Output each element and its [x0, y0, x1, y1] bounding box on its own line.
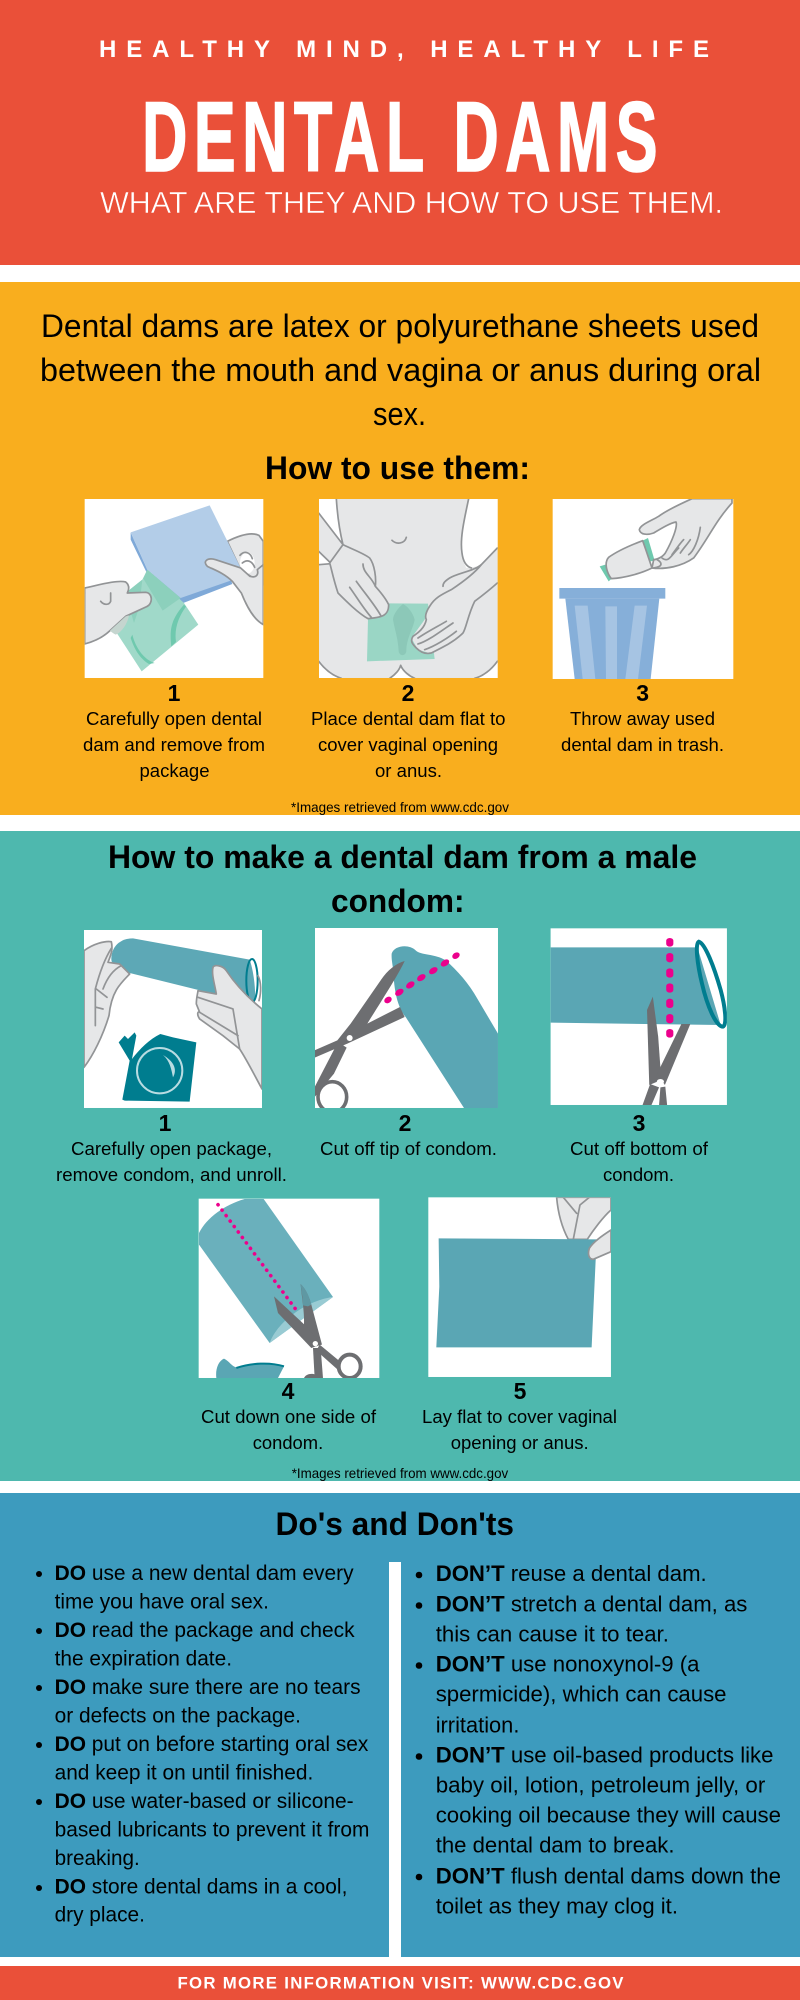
step 3: 3 — [636, 680, 649, 706]
footer: FOR MORE INFORMATION VISIT: WWW.CDC.GOV — [178, 1974, 624, 1993]
list: do: DO use a new dental dam every — [55, 1561, 354, 1585]
subtitle: WHAT ARE THEY AND HOW TO USE THEM. — [100, 185, 723, 220]
step 1 — [83, 680, 265, 781]
step 3: condom. — [603, 1164, 674, 1185]
list: do: or defects on the package. — [55, 1704, 301, 1728]
step 2: Place dental dam flat to — [311, 708, 506, 729]
illustration: open package and unroll — [84, 930, 262, 1108]
step 1: package — [140, 760, 210, 781]
list: don't: spermicide), which can cause — [436, 1682, 726, 1707]
list: don't: DON’T use nonoxynol-9 (a — [436, 1652, 700, 1677]
list: do: based lubricants to prevent it from — [55, 1818, 369, 1842]
list: do: DO store dental dams in a cool, — [55, 1874, 347, 1898]
intro text: Dental dams are latex or polyurethane sheets used — [41, 308, 759, 344]
image credit: *Images retrieved from www.cdc.gov — [291, 799, 509, 815]
heading: how to use them: How to use them: — [265, 450, 530, 486]
list: don't: the dental dam to break. — [436, 1833, 674, 1858]
list: don't: DON’T flush dental dams down the — [436, 1863, 781, 1888]
list: do: breaking. — [55, 1846, 140, 1870]
list: do: DO make sure there are no tears — [55, 1675, 361, 1699]
illustration: cut down one side — [199, 1199, 379, 1378]
illustration: throw away — [553, 499, 733, 679]
step 2: or anus. — [375, 760, 442, 781]
list: do: time you have oral sex. — [55, 1590, 269, 1614]
step 3: dental dam in trash. — [561, 734, 724, 755]
step 5: opening or anus. — [451, 1432, 589, 1453]
step 1: remove condom, and unroll. — [56, 1164, 287, 1185]
illustration: cut off tip — [315, 928, 498, 1112]
list: do: DO put on before starting oral sex — [55, 1732, 369, 1756]
step 2: 2 — [402, 680, 414, 706]
step 5: 5 — [514, 1378, 527, 1404]
step 4 — [201, 1378, 377, 1453]
list: don't: this can cause it to tear. — [436, 1622, 669, 1647]
list: do: and keep it on until finished. — [55, 1760, 313, 1784]
illustration: open package — [85, 499, 263, 678]
intro text: between the mouth and vagina or anus during oral — [40, 352, 761, 388]
step 3 — [561, 680, 724, 755]
step 3 — [570, 1110, 709, 1185]
step 1: 1 — [159, 1110, 172, 1136]
list: do: DO use water-based or silicone- — [55, 1789, 354, 1813]
footer — [0, 1966, 800, 2000]
step 1: 1 — [168, 680, 181, 706]
step 2: 2 — [399, 1110, 411, 1136]
image credit: *Images retrieved from www.cdc.gov — [292, 1465, 508, 1481]
step 3: Cut off bottom of — [570, 1138, 709, 1159]
step 4: condom. — [253, 1432, 323, 1453]
list: don't: baby oil, lotion, petroleum jelly, or — [436, 1773, 766, 1798]
list: do: DO read the package and check — [55, 1618, 355, 1642]
list: don't — [416, 1561, 781, 1918]
step 5 — [422, 1378, 617, 1453]
panel: header — [0, 0, 800, 265]
intro text: sex. — [373, 396, 426, 432]
step 1: dam and remove from — [83, 734, 265, 755]
list: don't: DON’T use oil-based products like — [436, 1743, 774, 1768]
list: do — [36, 1561, 369, 1927]
list: do: the expiration date. — [55, 1647, 232, 1671]
step 5: Lay flat to cover vaginal — [422, 1406, 617, 1427]
step 4: Cut down one side of — [201, 1406, 377, 1427]
step 3: 3 — [633, 1110, 645, 1136]
list: don't: irritation. — [436, 1713, 519, 1738]
heading: make a dental dam — [108, 839, 697, 919]
intro text — [40, 308, 761, 432]
list: don't: toilet as they may clog it. — [436, 1893, 678, 1918]
step 1: Carefully open package, — [71, 1138, 272, 1159]
step 1: Carefully open dental — [86, 708, 262, 729]
illustration: place dam — [318, 498, 498, 679]
heading: make a dental dam: condom: — [331, 883, 464, 919]
panel: how to use — [0, 282, 800, 815]
heading: make a dental dam: How to make a dental dam from a male — [108, 839, 697, 875]
list: don't: DON’T stretch a dental dam, as — [436, 1592, 747, 1617]
step 3: Throw away used — [570, 708, 715, 729]
list: don't: cooking oil because they will cause — [436, 1803, 781, 1828]
step 2: Cut off tip of condom. — [320, 1138, 497, 1159]
step 2 — [320, 1110, 497, 1159]
step 1 — [56, 1110, 287, 1185]
heading: do's and don'ts: Do's and Don'ts — [276, 1506, 514, 1542]
step 2: cover vaginal opening — [318, 734, 498, 755]
panel: do's and don'ts — [0, 1493, 800, 1958]
illustration: cut off bottom — [551, 928, 727, 1105]
kicker: healthy mind, healthy life: HEALTHY MIND, HEALTHY LIFE — [99, 36, 709, 63]
illustration: lay flat — [428, 1197, 611, 1377]
step 2 — [311, 680, 506, 781]
step 4: 4 — [282, 1378, 295, 1404]
list: don't: DON’T reuse a dental dam. — [436, 1561, 707, 1586]
panel: make from condom — [0, 831, 800, 1481]
list: do: dry place. — [55, 1903, 145, 1927]
